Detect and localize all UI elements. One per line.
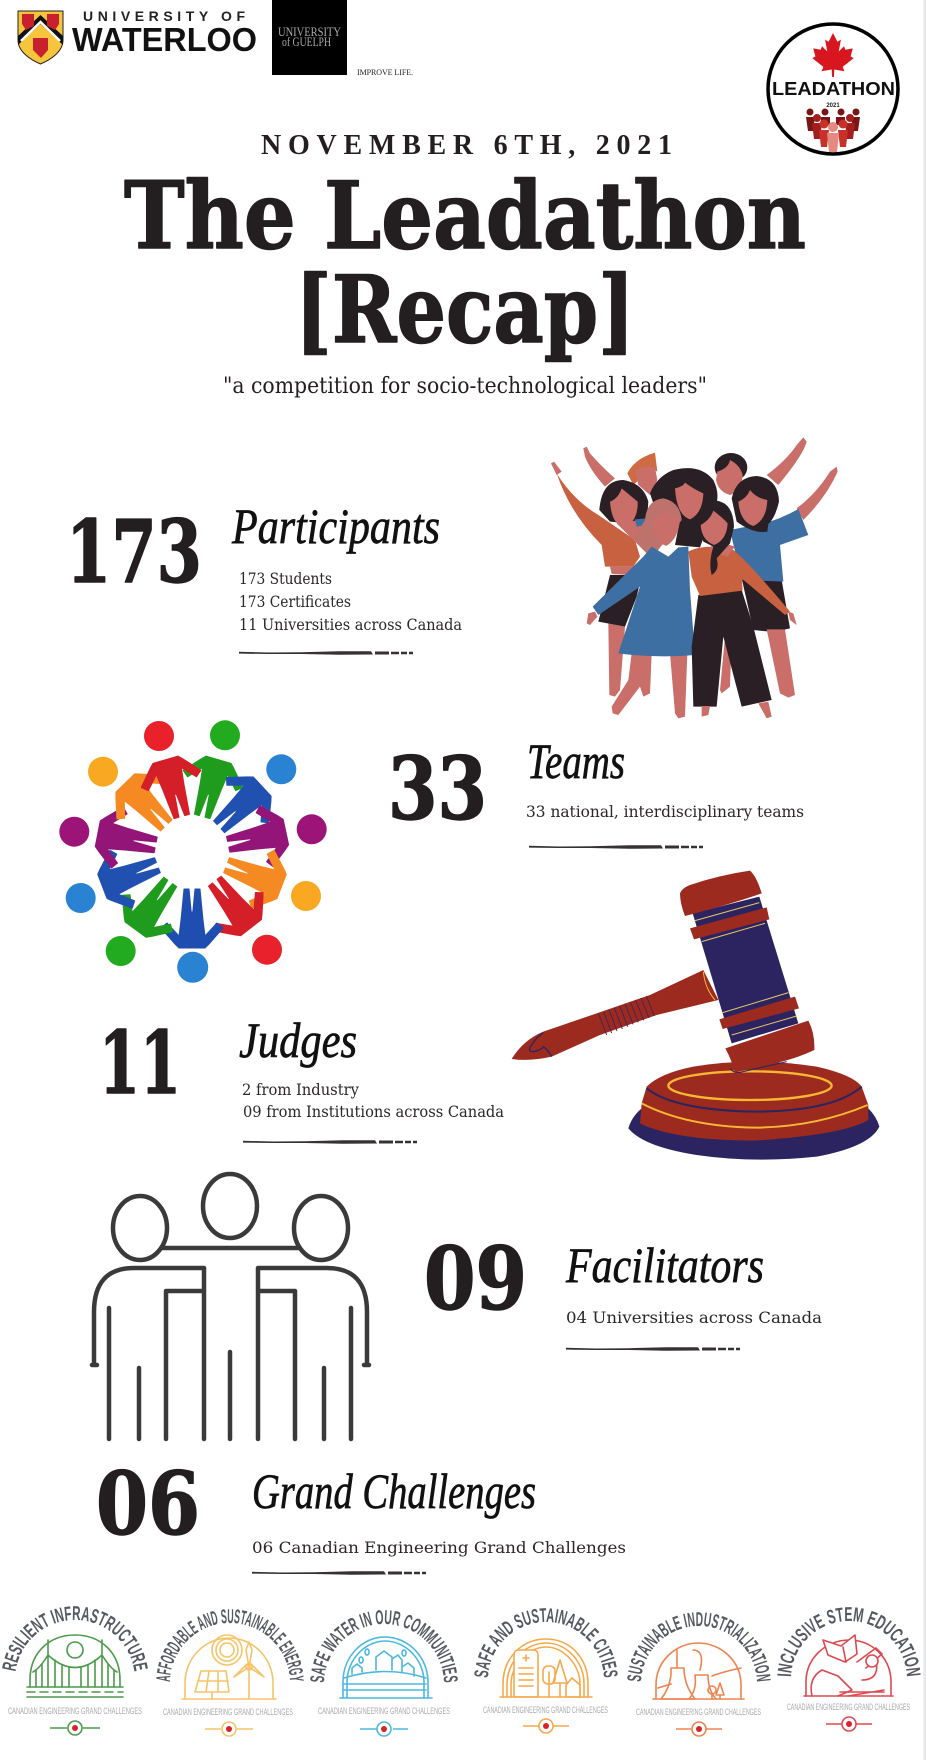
figure: yellow xyxy=(215,836,321,915)
icon: book, microscope and hand xyxy=(804,1635,893,1696)
date heading: NOVEMBER 6TH, 2021 xyxy=(261,130,672,161)
icon: city xyxy=(500,1639,592,1697)
lower band xyxy=(719,997,799,1029)
text: University of: UNIVERSITY OF xyxy=(83,8,245,24)
pants xyxy=(692,590,772,707)
stat: judges xyxy=(99,1012,504,1144)
text: Leadathon: LEADATHON xyxy=(772,79,895,99)
neck xyxy=(710,540,735,557)
icon: sun, solar panel and turbine xyxy=(182,1635,276,1699)
yellow ring xyxy=(668,1071,832,1100)
figure: blue bottom xyxy=(161,889,223,983)
badge: resilient infrastructure: RESILIENT INFRASTRUCTURE xyxy=(2,1606,148,1672)
icon: water and houses xyxy=(340,1637,432,1698)
marker xyxy=(360,1722,408,1736)
blue dress xyxy=(593,547,695,656)
illustration: circle of colourful people xyxy=(59,720,327,983)
text: of Guelph: of GUELPH xyxy=(282,34,331,49)
badge: safe and sustainable cities: SAFE AND SUSTAINABLE CITIES xyxy=(474,1608,618,1678)
figure: green left xyxy=(106,864,195,966)
sounding block base xyxy=(628,1108,879,1160)
title line 2: [Recap] xyxy=(295,255,635,364)
icon: Waterloo shield xyxy=(18,11,63,64)
badge: sustainable industrialization xyxy=(627,1612,771,1737)
badge: sustainable industrialization: SUSTAINABLE INDUSTRIALIZATION xyxy=(627,1612,771,1682)
gold pinstripes xyxy=(695,903,797,1035)
top-right woman xyxy=(715,453,747,495)
center woman xyxy=(650,468,717,547)
handle xyxy=(512,970,718,1060)
right woman's head xyxy=(732,476,779,532)
tagline: "a competition for socio-technological leaders" xyxy=(223,374,707,399)
badge: safe water in our communities: CANADIAN ENGINEERING GRAND CHALLENGES xyxy=(318,1706,450,1717)
upper band xyxy=(690,907,769,939)
icon: maple leaf xyxy=(812,33,854,77)
details: 33 national, interdisciplinary teams xyxy=(526,803,804,821)
number: 33: 33 xyxy=(388,739,487,840)
icon: red people xyxy=(806,108,860,152)
badge: safe and sustainable cities xyxy=(474,1608,618,1734)
orange-haired woman xyxy=(627,453,657,495)
badge: safe water in our communities xyxy=(310,1610,458,1737)
figure: green xyxy=(172,720,248,825)
badge: resilient infrastructure: CANADIAN ENGINEERING GRAND CHALLENGES xyxy=(8,1706,142,1717)
handle ribs xyxy=(598,996,654,1035)
drum xyxy=(640,1062,868,1141)
badge: sustainable industrialization: CANADIAN ENGINEERING GRAND CHALLENGES xyxy=(636,1707,761,1718)
marker xyxy=(523,1719,569,1733)
figure: blue xyxy=(198,754,296,849)
logo: Leadathon badge xyxy=(768,24,898,154)
stat: grand challenges xyxy=(96,1454,626,1575)
front-right face xyxy=(701,511,728,545)
illustration: group of cheering women xyxy=(551,437,838,718)
badge: inclusive stem education: INCLUSIVE STEM EDUCATION xyxy=(777,1607,921,1676)
dress legs xyxy=(612,653,687,718)
front-left face xyxy=(652,510,680,546)
logo: University of Guelph xyxy=(272,0,413,77)
badge: safe water in our communities: SAFE WATER IN OUR COMMUNITIES xyxy=(310,1610,458,1682)
right blue shirt xyxy=(730,509,808,582)
logo: University of Waterloo xyxy=(18,8,257,64)
figure: purple right xyxy=(222,802,327,875)
illustration: gavel xyxy=(512,871,879,1160)
left woman's head xyxy=(599,480,648,543)
right hand and feet xyxy=(702,612,797,718)
right skirt xyxy=(742,578,790,632)
text: Waterloo: WATERLOO xyxy=(72,21,257,58)
text: Improve Life: IMPROVE LIFE. xyxy=(357,68,413,77)
heading: Teams: Teams xyxy=(527,733,625,789)
badge: affordable and sustainable energy: AFFORDABLE AND SUSTAINABLE ENERGY xyxy=(156,1609,304,1682)
details: 06 Canadian Engineering Grand Challenges xyxy=(252,1539,626,1557)
stat: teams xyxy=(388,733,804,849)
badge: affordable and sustainable energy: CANADIAN ENGINEERING GRAND CHALLENGES xyxy=(163,1707,293,1718)
details xyxy=(242,1081,504,1121)
details xyxy=(239,570,462,634)
heading: Facilitators: Facilitators xyxy=(565,1237,764,1293)
orange top xyxy=(688,547,790,615)
badge: safe and sustainable cities: CANADIAN ENGINEERING GRAND CHALLENGES xyxy=(483,1705,608,1716)
number: 09: 09 xyxy=(424,1229,527,1330)
heading: Grand Challenges: Grand Challenges xyxy=(252,1463,536,1519)
badge: affordable and sustainable energy xyxy=(156,1609,304,1737)
icon: cooling towers xyxy=(653,1643,744,1699)
number: 173: 173 xyxy=(66,502,202,603)
handle squiggle xyxy=(530,1033,552,1057)
details: 09 from Institutions across Canada xyxy=(243,1103,504,1121)
front-left hair xyxy=(633,498,682,558)
figure: red right xyxy=(190,862,282,965)
figure: purple left xyxy=(59,803,162,875)
marker xyxy=(826,1717,872,1731)
bottom cap xyxy=(725,1021,814,1073)
left woman's orange top xyxy=(551,462,640,575)
icon: bridge xyxy=(27,1635,123,1697)
back legs xyxy=(608,623,795,698)
figure: red xyxy=(136,721,212,825)
left skirt xyxy=(598,575,642,627)
text: University: UNIVERSITY xyxy=(278,24,341,39)
black box xyxy=(272,0,347,75)
details: 04 Universities across Canada xyxy=(566,1309,822,1327)
front-right hair and braid xyxy=(697,501,734,575)
badge: resilient infrastructure xyxy=(2,1606,148,1736)
back-left raised arm xyxy=(583,447,615,487)
stat: participants xyxy=(66,498,462,655)
figure: blue left xyxy=(66,836,169,915)
navy groove xyxy=(647,1087,862,1112)
stat: facilitators xyxy=(424,1229,822,1351)
head body xyxy=(693,897,798,1043)
cap edge xyxy=(730,1062,787,1072)
top cap xyxy=(680,871,762,916)
handle collar xyxy=(703,972,715,1000)
title line 1: The Leadathon xyxy=(124,161,806,270)
badge: inclusive stem education xyxy=(777,1607,921,1732)
figure: orange xyxy=(88,757,189,847)
number: 06: 06 xyxy=(96,1454,200,1555)
details: 173 Certificates xyxy=(239,593,351,611)
yellow groove xyxy=(642,1103,868,1128)
text: 2021: 2021 xyxy=(826,103,840,109)
marker xyxy=(676,1722,722,1736)
details: 173 Students xyxy=(239,570,332,588)
details: 11 Universities across Canada xyxy=(239,616,462,634)
details: 2 from Industry xyxy=(242,1081,359,1099)
back-right raised arm xyxy=(767,437,807,485)
icon: three facilitators outline xyxy=(92,1174,369,1439)
number: 11: 11 xyxy=(99,1013,181,1114)
badge ring xyxy=(768,24,898,154)
marker xyxy=(205,1722,253,1736)
marker xyxy=(50,1721,100,1735)
right raised arm xyxy=(797,467,838,520)
heading: Participants: Participants xyxy=(231,498,440,554)
heading: Judges: Judges xyxy=(239,1012,357,1068)
left hand xyxy=(587,612,597,625)
